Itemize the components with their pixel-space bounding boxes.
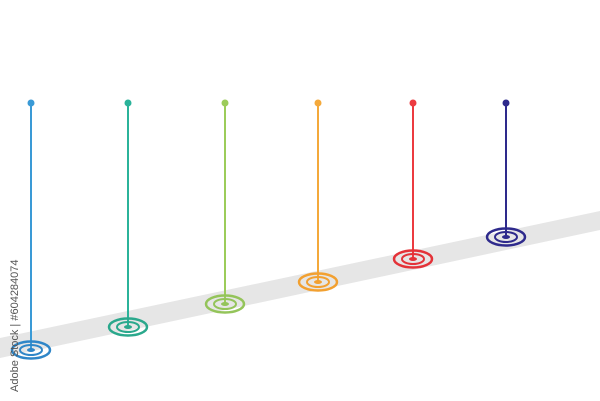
pin 3 green [206, 100, 244, 312]
pin 1 blue [12, 100, 50, 358]
watermark credit: Adobe Stock | #604284074 [9, 259, 21, 392]
gray road band [0, 211, 600, 358]
pin 2 teal [109, 100, 147, 336]
pin 5 red [394, 100, 432, 268]
pin 6 navy [487, 100, 525, 246]
pin 4 orange [299, 100, 337, 290]
